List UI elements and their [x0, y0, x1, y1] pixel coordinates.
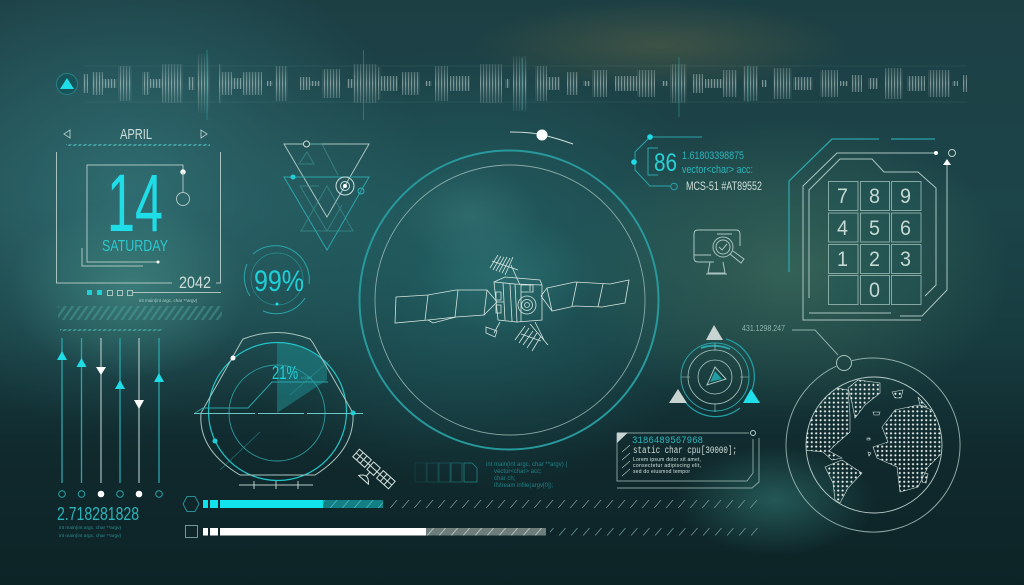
- keypad: [789, 139, 956, 320]
- slider panel: int main(int argc, char **argv): [59, 525, 122, 531]
- callout: 86 readout: 1.61803398875: [682, 150, 744, 162]
- number: 2.718281828: [57, 504, 139, 524]
- code text: int main(int argc, char **argv) {: [486, 462, 567, 468]
- keypad: 7: [837, 185, 848, 208]
- keypad: 9: [900, 185, 911, 208]
- panel: calendar: [56, 126, 222, 320]
- keypad: 1: [837, 248, 848, 271]
- gauge: 99%: [244, 246, 309, 314]
- orbit marker: [510, 130, 573, 144]
- code box: consectetur adipiscing elit,: [633, 463, 701, 469]
- icon: play up button: [56, 74, 78, 94]
- code box: sed do eiusmod tempor: [633, 469, 690, 475]
- keypad: 5: [869, 217, 880, 240]
- year: 2042: [179, 273, 211, 292]
- keypad: 0: [869, 279, 880, 302]
- radar chart: [194, 332, 363, 489]
- keypad: 2: [869, 248, 880, 271]
- progress bar: cyan: [183, 496, 760, 512]
- gauge: 99%: 99%: [254, 265, 304, 298]
- code text: ifstream infile(argv[0]);: [494, 483, 554, 489]
- globe: [742, 324, 960, 532]
- keypad: 3: [900, 248, 911, 271]
- keypad: 6: [900, 217, 911, 240]
- slider panel: int main(int argc, char **argv): [59, 533, 122, 539]
- code box: 3186489567968: [632, 436, 703, 447]
- waveform: [83, 50, 967, 120]
- weekday: SATURDAY: [102, 238, 168, 255]
- month: APRIL: [120, 126, 152, 143]
- play control widget: [669, 325, 760, 417]
- code box: Lorem ipsum dolor sit amet,: [633, 457, 701, 463]
- code text: vector<char> acc;: [494, 469, 542, 475]
- callout: 86 readout: [631, 134, 762, 193]
- date: 14: [107, 158, 163, 249]
- panel: calendar: int main(int argc, char **argv): [139, 298, 198, 303]
- progress bar: white: [186, 526, 760, 538]
- slider panel: [57, 329, 164, 539]
- radar chart: 21%: [272, 363, 298, 383]
- blocks: [415, 463, 477, 482]
- keypad: 8: [869, 185, 880, 208]
- world map: [803, 380, 945, 503]
- callout: 86 readout: 86: [654, 149, 677, 177]
- main circle: [360, 150, 658, 450]
- small satellite icon: [346, 449, 395, 496]
- code box: static char cpu[30000];: [633, 445, 737, 457]
- code box: [617, 430, 759, 488]
- code text: [486, 462, 567, 489]
- code text: char ch;: [494, 476, 516, 482]
- triangles emblem: [284, 141, 369, 250]
- callout: 86 readout: MCS-51 #AT89552: [686, 179, 762, 193]
- callout: 86 readout: vector<char> acc:: [682, 164, 753, 176]
- satellite drawing: [395, 255, 629, 351]
- radar chart: LOAD: [301, 375, 312, 380]
- coordinates label: 431.1298.247: [742, 324, 785, 333]
- icon: monitor with magnifier: [694, 230, 744, 274]
- keypad: 4: [837, 217, 848, 240]
